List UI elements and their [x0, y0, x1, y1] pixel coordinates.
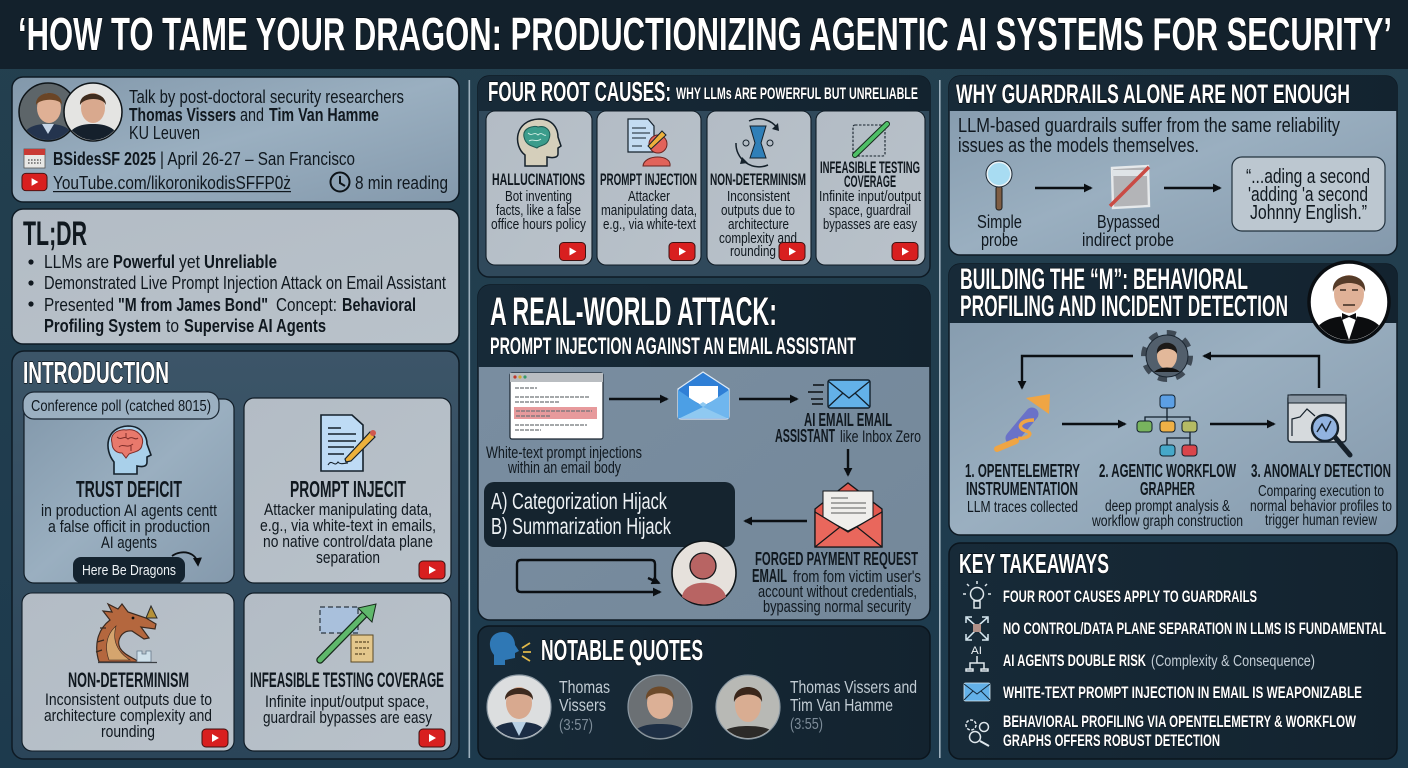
speaker portraits [19, 83, 122, 142]
description [719, 188, 797, 260]
takeaway 3: AI AGENTS DOUBLE RISK [1003, 651, 1146, 670]
arrow [847, 449, 849, 475]
caption: white-text prompt injections: within an email body [507, 459, 622, 477]
step 1 label: INSTRUMENTATION [966, 478, 1078, 499]
icon: document and attacker [628, 119, 670, 166]
bullet list: Profiling System [44, 316, 161, 336]
icon: AI hierarchy: AI [971, 645, 982, 657]
step 1 label: 1. OPENTELEMETRY [965, 460, 1080, 481]
card: prompt injection [244, 398, 451, 583]
caption: forged payment request: account without credentials, [758, 583, 917, 601]
step 3 label: trigger human review [1265, 512, 1378, 529]
icon: hourglass cycle [736, 119, 779, 167]
icon: youtube [669, 242, 695, 260]
speaker text: Thomas Vissers [129, 105, 236, 125]
icon: document and pencil [321, 415, 376, 471]
card: infeasible testing coverage [244, 593, 451, 751]
icon: light bulb [963, 581, 991, 608]
takeaway 3: (Complexity & Consequence) [1151, 653, 1315, 670]
bullet list: yet [179, 252, 200, 272]
label: bypassed indirect probe [1082, 212, 1174, 250]
heading: infeasible testing coverage: INFEASIBLE TESTING [820, 158, 920, 177]
step 2 label: 2. AGENTIC WORKFLOW [1099, 460, 1236, 481]
description [260, 501, 436, 567]
heading: four root causes: FOUR ROOT CAUSES: [488, 76, 671, 107]
takeaway 1: FOUR ROOT CAUSES APPLY TO GUARDRAILS [1003, 587, 1257, 606]
caption: white-text prompt injections: White-text prompt injections [486, 444, 642, 462]
event line: BSidesSF 2025 [53, 149, 156, 169]
speaker names: (3:55) [790, 716, 823, 733]
description: Inconsistent [727, 188, 791, 205]
heading: real-world attack: A REAL-WORLD ATTACK: [490, 290, 777, 334]
label: AI email assistant: AI EMAIL EMAIL [804, 410, 892, 430]
step 1 label [965, 460, 1080, 516]
step 1 label: LLM traces collected [967, 499, 1078, 516]
speaker text: Talk by post-doctoral security researchers [129, 87, 404, 107]
heading: key takeaways: KEY TAKEAWAYS [959, 548, 1109, 579]
speaker text [129, 87, 404, 143]
description: Attacker [628, 188, 670, 205]
step 2 label: GRAPHER [1140, 478, 1195, 499]
quote box: “...ading a second [1246, 166, 1370, 188]
icon: youtube [419, 561, 445, 579]
badge: here be dragons [73, 557, 185, 583]
box: hijack types: B) Summarization Hijack [491, 513, 671, 539]
panel: speakers and talk info [12, 77, 459, 202]
card: non-determinism [22, 593, 234, 751]
heading: real-world attack: PROMPT INJECTION AGAINST AN EMAIL ASSISTANT [490, 333, 856, 360]
description [958, 115, 1340, 157]
arrow: loop into user [517, 560, 660, 592]
bullet list: Behavioral [342, 295, 416, 315]
heading: trust deficit: TRUST DEFICIT [76, 476, 182, 502]
speaker names [790, 677, 917, 733]
quote box: Johnny English.” [1250, 202, 1367, 224]
caption: forged payment request: from fom victim user's [793, 568, 921, 586]
heading: non-determinism: NON-DETERMINISM [710, 170, 806, 189]
bullet list: Demonstrated Live Prompt Injection Attack on Email Assistant [44, 273, 446, 293]
bullet list: to [166, 316, 179, 336]
description: Inconsistent outputs due to [45, 691, 212, 709]
icon: youtube [202, 729, 228, 747]
heading: prompt injecit: PROMPT INJECIT [290, 476, 406, 502]
box: hijack types [484, 482, 735, 547]
takeaway 1 [963, 581, 1257, 608]
caption: forged payment request: bypassing normal security [763, 598, 912, 616]
description: rounding [730, 243, 776, 260]
takeaway 5 [966, 712, 1357, 750]
portrait: James Bond [1309, 262, 1389, 342]
quote: Thomas Vissers [487, 675, 610, 740]
description: no native control/data plane [263, 533, 433, 551]
bullet list [28, 252, 446, 336]
label: bypassed indirect probe: indirect probe [1082, 230, 1174, 250]
speaker name: Vissers [559, 695, 606, 715]
panel: notable quotes [478, 626, 930, 759]
heading: four root causes: WHY LLMs ARE POWERFUL BUT UNRELIABLE [676, 84, 918, 103]
speaker text: Tim Van Hamme [269, 105, 379, 125]
card: trust deficit [24, 399, 234, 583]
heading: infeasible testing coverage: INFEASIBLE TESTING COVERAGE [250, 669, 444, 692]
speaker name: Thomas [559, 677, 610, 697]
description: e.g., via white-text [603, 216, 697, 233]
description: space, guardrail [829, 202, 911, 219]
card: infeasible testing coverage [816, 111, 925, 265]
heading: real-world attack [490, 290, 856, 360]
description [41, 502, 217, 552]
description: separation [316, 549, 380, 567]
card: hallucinations [486, 111, 592, 265]
step 3 label [1250, 460, 1392, 529]
description: bypasses are easy [823, 216, 917, 233]
icon: fast envelope [808, 380, 870, 408]
panel: four root causes [478, 76, 930, 277]
icon: brain in head [108, 426, 151, 474]
icon: clock [330, 172, 350, 192]
speaker name [559, 677, 610, 734]
arrow [609, 398, 667, 400]
panel: why guardrails are not enough [949, 76, 1397, 255]
bullet list: "M from James Bond" [118, 295, 268, 315]
icon: brain head [518, 119, 561, 166]
label: AI email assistant: like Inbox Zero [840, 427, 921, 446]
label: simple probe: Simple [977, 212, 1022, 232]
caption: forged payment request: FORGED PAYMENT REQUEST [755, 549, 918, 569]
arrow: step 3 to M [1204, 356, 1319, 388]
step 2 label [1091, 460, 1243, 530]
icon: youtube [892, 242, 918, 260]
heading: hallucinations: HALLUCINATIONS [492, 170, 585, 189]
description: issues as the models themselves. [958, 135, 1199, 157]
speaker name: (3:57) [559, 717, 593, 734]
heading: introduction: INTRODUCTION [23, 355, 169, 390]
icon: calendar [24, 149, 45, 168]
arrow [1164, 187, 1220, 189]
bullet list: Presented [44, 295, 114, 315]
icon: magnifier [986, 161, 1012, 210]
icon: dashed box and green arrow [320, 604, 376, 662]
pill: conference poll: Conference poll (catched 8015) [31, 398, 211, 415]
event line [53, 149, 355, 169]
box: hijack types: A) Categorization Hijack [491, 488, 667, 514]
arrow [1035, 187, 1091, 189]
description: Infinite input/output [819, 188, 922, 205]
icon: youtube [22, 173, 47, 191]
arrow [739, 398, 797, 400]
description: architecture complexity and [44, 707, 212, 725]
icon: user [672, 541, 736, 605]
description [491, 188, 586, 233]
card: non-determinism [707, 111, 811, 265]
description [44, 691, 212, 741]
label: simple probe: probe [981, 230, 1018, 250]
takeaway 3 [966, 645, 1315, 671]
heading: infeasible testing coverage [820, 158, 920, 191]
description: facts, like a false [496, 202, 581, 219]
card: prompt injection [597, 111, 701, 265]
panel: introduction [12, 351, 459, 759]
pill: conference poll [23, 392, 219, 419]
portrait [628, 675, 692, 740]
heading: non-determinism: NON-DETERMINISM [68, 669, 189, 692]
icon: red envelope [815, 483, 882, 547]
icon: separating arrows [966, 617, 988, 640]
event line: | April 26-27 – San Francisco [160, 149, 355, 169]
description [601, 188, 697, 233]
label: AI email assistant [775, 410, 921, 446]
description: office hours policy [491, 216, 586, 233]
quote box: 'adding 'a second [1248, 184, 1368, 206]
portrait [716, 675, 780, 740]
description: Bot inventing [505, 188, 572, 205]
description: guardrail bypasses are easy [263, 709, 433, 727]
description: AI agents [101, 534, 157, 552]
icon: open blue envelope [678, 372, 729, 419]
heading: building the M [960, 263, 1288, 323]
step 2 label: workflow graph construction [1091, 513, 1243, 530]
arrow: M to step 1 [1022, 356, 1133, 388]
panel: key takeaways [949, 543, 1397, 759]
bullet list: Powerful [113, 252, 175, 272]
icon: email window [510, 373, 603, 439]
icon: dragon [96, 604, 157, 662]
panel: building the M [949, 262, 1397, 535]
heading: TL;DR: TL;DR [23, 215, 87, 253]
badge: here be dragons: Here Be Dragons [82, 562, 176, 579]
icon: anomaly detection [1288, 395, 1350, 455]
icon: workflow graph [1137, 395, 1197, 456]
icon: bypassed note [1110, 166, 1149, 208]
description: outputs due to [721, 202, 795, 219]
description: Attacker manipulating data, [264, 501, 432, 519]
bullet list: Concept: [276, 295, 337, 315]
icon: gear with M [1144, 333, 1190, 379]
icon: AI hierarchy [966, 645, 988, 671]
step 2 label: deep prompt analysis & [1105, 498, 1231, 515]
reading time: 8 min reading [355, 173, 448, 193]
icon: youtube [560, 242, 586, 260]
description: in production AI agents centt [41, 502, 217, 520]
speaker text: KU Leuven [129, 123, 200, 143]
video link: YouTube.com/likoronikodisSFFP0ż [53, 173, 291, 193]
speaker names: Tim Van Hamme [790, 695, 893, 715]
icon: envelope [964, 683, 990, 701]
panel: real-world attack [478, 285, 930, 620]
description: rounding [101, 723, 155, 741]
takeaway 5: GRAPHS OFFERS ROBUST DETECTION [1003, 731, 1220, 750]
arrow: curved [172, 552, 198, 565]
icon: opentelemetry [997, 394, 1050, 449]
label: AI email assistant: ASSISTANT [775, 426, 835, 446]
label: bypassed indirect probe: Bypassed [1097, 212, 1160, 232]
label: simple probe [977, 212, 1022, 250]
bullet list: LLMs are [44, 252, 109, 272]
panel: TL;DR [12, 209, 459, 344]
description: a false officit in production [48, 518, 210, 536]
icon: youtube [779, 242, 805, 260]
arrow [1062, 423, 1125, 425]
speaker names: Thomas Vissers and [790, 677, 917, 697]
bullet list: Unreliable [204, 252, 277, 272]
quote: Thomas Vissers and Tim Van Hamme [716, 675, 917, 740]
caption: forged payment request: EMAIL [752, 566, 787, 586]
arrow [745, 520, 807, 522]
description [819, 188, 922, 233]
description: architecture [728, 216, 789, 233]
quote box [1232, 157, 1385, 231]
icon: gears and magnifier [966, 720, 989, 746]
heading: infeasible testing coverage: COVERAGE [844, 172, 896, 191]
caption: forged payment request [752, 549, 921, 616]
icon: dashed square and green line [853, 124, 887, 156]
description: complexity and [719, 230, 797, 247]
icon: youtube [419, 729, 445, 747]
bullet list: Supervise AI Agents [184, 316, 326, 336]
description [263, 693, 433, 727]
arrow [1210, 423, 1274, 425]
speaker text: and [240, 105, 264, 125]
portrait [487, 675, 551, 740]
description: e.g., via white-text in emails, [260, 517, 436, 535]
description: Infinite input/output space, [265, 693, 429, 711]
icon: speaking head [490, 632, 531, 665]
description: manipulating data, [601, 202, 697, 219]
heading: notable quotes: NOTABLE QUOTES [541, 635, 703, 667]
heading: prompt injection: PROMPT INJECTION [600, 170, 697, 189]
caption: white-text prompt injections [486, 444, 642, 477]
